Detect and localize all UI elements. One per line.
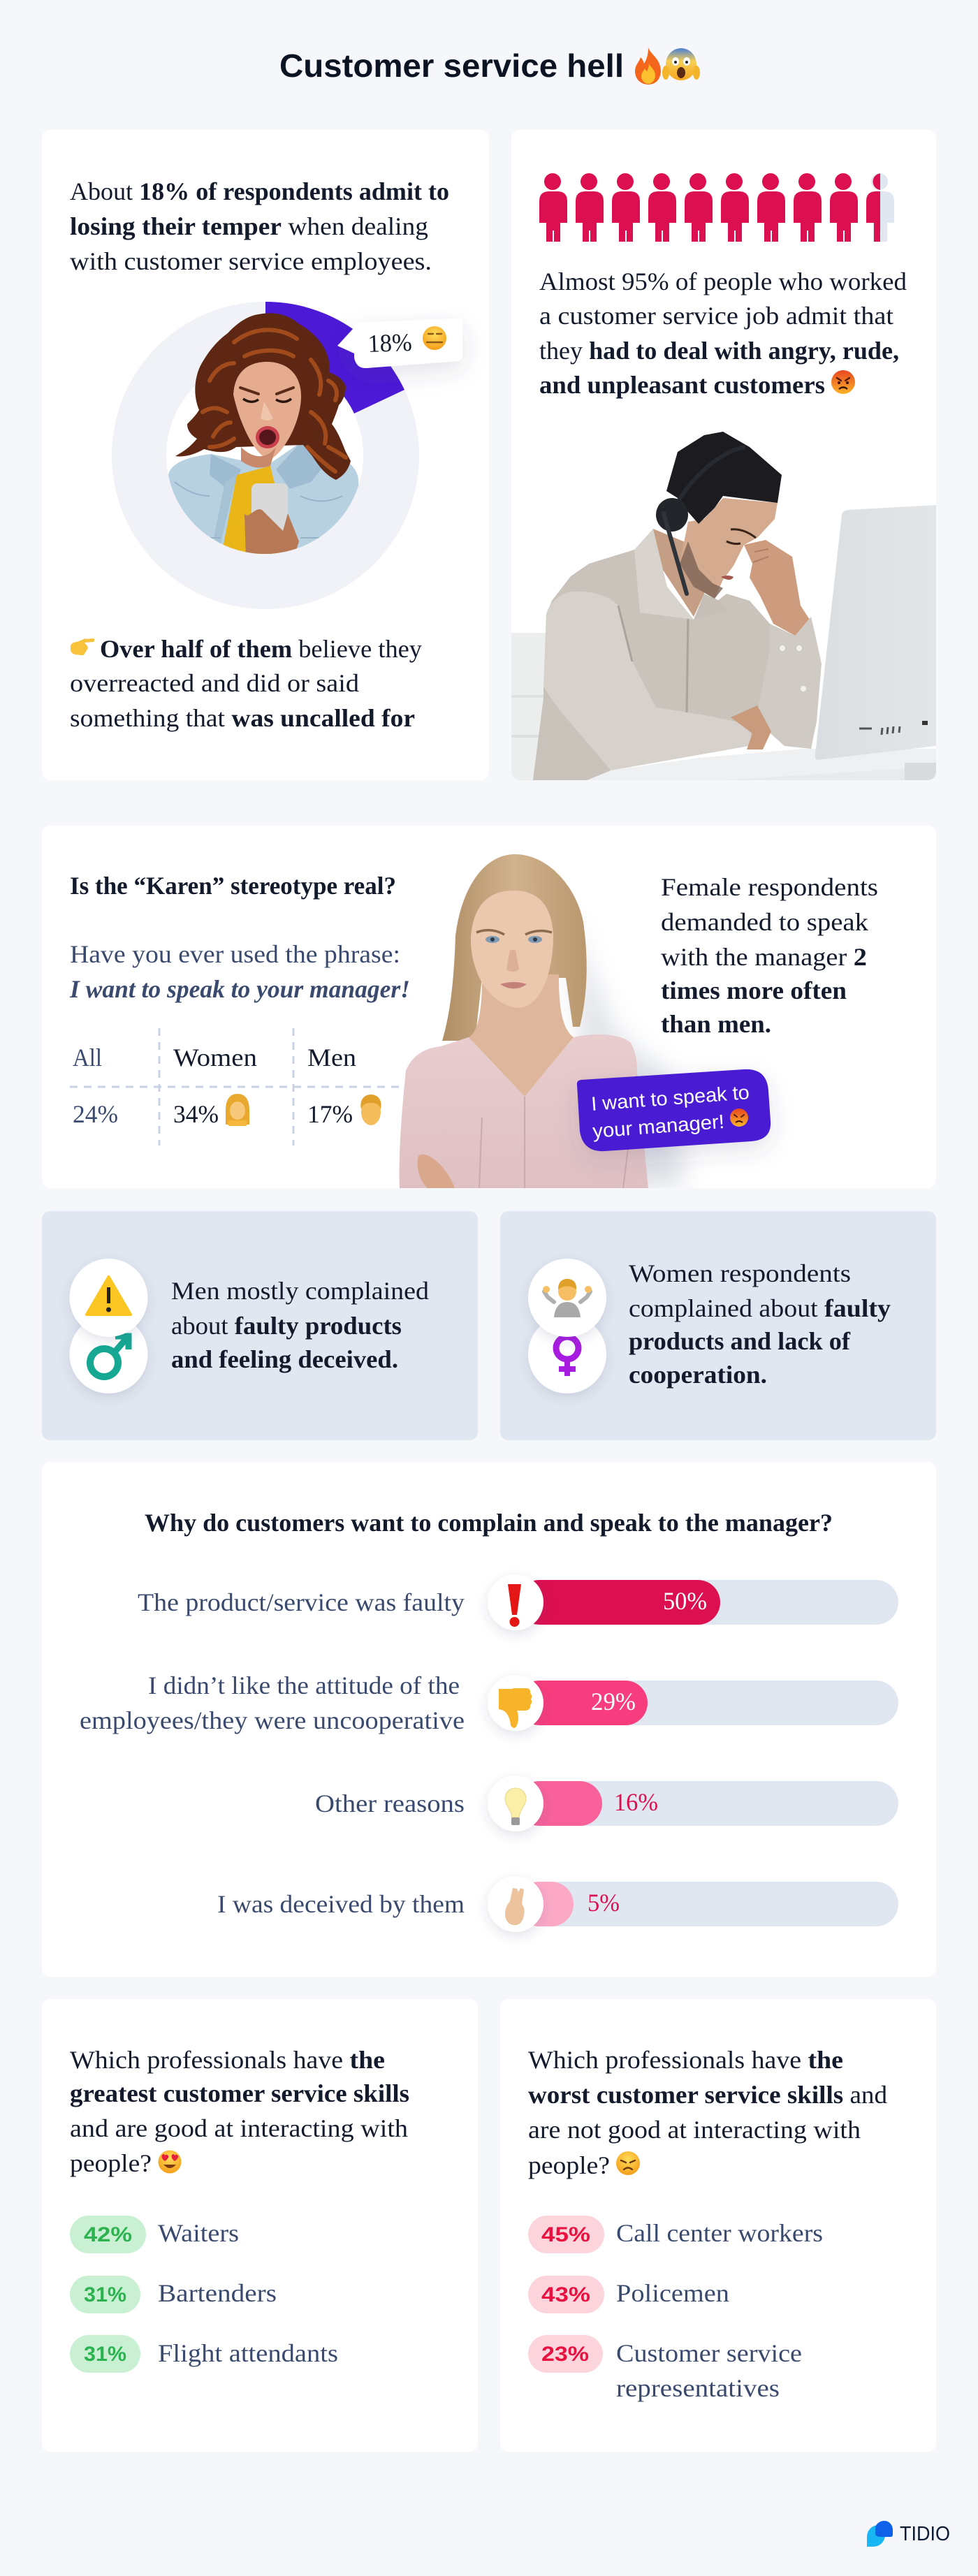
text: worst skills question: are not good at interacting with	[528, 2116, 861, 2144]
text: worst skills question: people?	[528, 2151, 610, 2179]
table: phrase usage: Women	[173, 1044, 257, 1071]
table: phrase usage	[70, 1028, 404, 1146]
text: men complaints	[171, 1277, 429, 1373]
text: female respondents: times more often	[661, 976, 847, 1004]
title: Customer service hell	[279, 47, 624, 84]
heading: Karen stereotype: Is the “Karen” stereotype real?	[70, 872, 396, 900]
icon: thumbs down	[488, 1675, 543, 1731]
conclusion text: Over half of them believe they	[100, 635, 422, 663]
bar: deceived 5%: 5%	[587, 1889, 620, 1917]
table: phrase usage: All	[73, 1044, 102, 1071]
bar: other reasons 16%: Other reasons	[315, 1790, 465, 1817]
speech bubble: I want to speak to	[590, 1081, 750, 1115]
icon: female symbol badge	[528, 1315, 606, 1393]
icon: warning badge	[70, 1259, 148, 1337]
list row: bartenders 31%	[70, 2276, 277, 2313]
conclusion text	[70, 635, 422, 732]
text: 95% dealt with angry customers: they had to deal with angry, rude,	[539, 337, 899, 365]
text: men complaints: about faulty products	[171, 1312, 402, 1340]
list row: flight attendants 31%: 31%	[84, 2343, 126, 2366]
panel: worst skills	[500, 1999, 936, 2452]
text: female respondents: Female respondents	[661, 873, 878, 901]
bar: other reasons 16%	[315, 1776, 898, 1831]
list row: customer service 23%: 23%	[541, 2343, 589, 2366]
text: greatest skills question	[70, 2046, 409, 2177]
text: 95% dealt with angry customers	[539, 268, 907, 399]
icon: heart eyes emoji	[158, 2150, 182, 2174]
photo: shouting woman with phone	[166, 313, 363, 559]
panel: why customers complain	[42, 1462, 936, 1977]
photo: stressed call-center man	[511, 432, 936, 780]
text: greatest skills question: and are good at interacting with	[70, 2114, 408, 2142]
text: worst skills question: worst customer service skills and	[528, 2081, 887, 2109]
collar	[634, 529, 694, 620]
bar: deceived 5%: I was deceived by them	[217, 1890, 465, 1918]
icon: expressionless emoji	[423, 326, 446, 350]
intro text: About 18% of respondents admit to	[70, 177, 449, 205]
list row: flight attendants 31%: Flight attendants	[158, 2339, 338, 2367]
callout: 18%: 18%	[367, 328, 412, 358]
intro text	[70, 177, 449, 275]
icon: male symbol badge	[70, 1315, 148, 1393]
panel: women complaints	[500, 1211, 936, 1440]
text: worst skills question	[528, 2046, 887, 2179]
intro text: losing their temper when dealing	[70, 212, 428, 240]
list row: customer service 23%: Customer service	[616, 2339, 802, 2367]
donut chart 18%	[112, 302, 419, 609]
speech bubble: your manager!	[592, 1111, 725, 1142]
text: greatest skills question: greatest customer service skills	[70, 2079, 409, 2107]
icon: woman emoji	[226, 1094, 249, 1126]
forearm	[731, 705, 771, 749]
bar: other reasons 16%: 16%	[614, 1788, 658, 1816]
headset	[678, 447, 745, 503]
icon: light bulb	[488, 1776, 543, 1831]
icon: angry face emoji	[730, 1108, 748, 1127]
bar: attitude 29%: I didn’t like the attitude of the	[148, 1671, 460, 1699]
text: women complaints: complained about faulty	[629, 1294, 891, 1322]
text: women complaints: products and lack of	[629, 1327, 851, 1355]
icon: man emoji	[360, 1095, 381, 1125]
icon: fire emoji	[635, 47, 661, 85]
list row: bartenders 31%: Bartenders	[158, 2279, 277, 2307]
pictogram: 95% of people	[539, 173, 894, 242]
list row: call center 45%	[528, 2216, 823, 2253]
hand	[744, 540, 811, 636]
table: phrase usage: 17%	[307, 1100, 353, 1128]
face	[680, 498, 778, 599]
table: phrase usage: 34%	[173, 1100, 219, 1128]
text: female respondents: demanded to speak	[661, 908, 868, 936]
list row: customer service 23%	[528, 2335, 802, 2402]
monitor	[815, 505, 936, 760]
table: phrase usage: Men	[307, 1044, 356, 1071]
text: 95% dealt with angry customers: a customer service job admit that	[539, 302, 893, 330]
bar: deceived 5%	[217, 1876, 898, 1932]
icon: screaming face emoji	[662, 48, 700, 80]
torso	[533, 550, 771, 780]
table: phrase usage: 24%	[73, 1100, 118, 1128]
icon: exclamation mark	[488, 1574, 543, 1630]
bar: product faulty 50%: The product/service was faulty	[138, 1588, 465, 1616]
speech bubble	[577, 1069, 771, 1151]
list row: call center 45%: 45%	[541, 2223, 590, 2246]
bar: product faulty 50%	[138, 1574, 898, 1630]
text: 95% dealt with angry customers: Almost 95% of people who worked	[539, 268, 907, 295]
intro text: with customer service employees.	[70, 247, 432, 275]
panel: 95% dealt with angry customers	[511, 130, 936, 780]
text: female respondents	[661, 873, 878, 1038]
panel: 18% lost temper	[42, 130, 489, 780]
text: greatest skills question: Which professionals have the	[70, 2046, 385, 2074]
bar: attitude 29%: 29%	[591, 1688, 636, 1715]
question text: I want to speak to your manager!	[69, 975, 410, 1003]
conclusion text: something that was uncalled for	[70, 704, 415, 732]
panel: Karen stereotype	[42, 826, 936, 1188]
callout: 18%	[337, 319, 462, 368]
list row: waiters 42%	[70, 2216, 239, 2253]
text: men complaints: and feeling deceived.	[171, 1345, 398, 1373]
hair	[666, 432, 782, 524]
text: greatest skills question: people?	[70, 2149, 152, 2177]
icon: pointing hand emoji	[71, 638, 94, 655]
heading: why complain: Why do customers want to complain and speak to the manager?	[145, 1509, 833, 1537]
list row: waiters 42%: Waiters	[158, 2219, 239, 2247]
text: women complaints	[629, 1259, 891, 1389]
text: 95% dealt with angry customers: and unpleasant customers	[539, 371, 825, 399]
text: worst skills question: Which professionals have the	[528, 2046, 843, 2074]
photo: frowning blonde woman	[400, 854, 685, 1188]
list row: customer service 23%: representatives	[616, 2374, 780, 2402]
bar: attitude 29%: employees/they were uncooperative	[80, 1706, 465, 1734]
text: women complaints: cooperation.	[629, 1361, 767, 1389]
panel: greatest skills	[42, 1999, 478, 2452]
question text	[69, 940, 410, 1003]
list row: flight attendants 31%	[70, 2335, 338, 2373]
sleeve	[759, 617, 822, 749]
text: women complaints: Women respondents	[629, 1259, 851, 1287]
list row: waiters 42%: 42%	[84, 2223, 132, 2246]
text: female respondents: than men.	[661, 1010, 771, 1038]
icon: disappointed emoji	[616, 2151, 640, 2175]
question text: Have you ever used the phrase:	[70, 940, 400, 968]
icon: angry face emoji	[831, 370, 855, 394]
panel: men complaints	[42, 1211, 478, 1440]
logo: Tidio: TIDIO	[900, 2523, 950, 2545]
logo: Tidio	[867, 2521, 950, 2547]
bar: attitude 29%	[80, 1671, 898, 1734]
list row: policemen 43%: Policemen	[616, 2279, 729, 2307]
bar: product faulty 50%: 50%	[663, 1587, 707, 1615]
icon: crossed fingers	[488, 1876, 543, 1932]
list row: policemen 43%	[528, 2276, 729, 2313]
icon: shrugging person badge	[528, 1259, 606, 1337]
text: female respondents: with the manager 2	[661, 943, 867, 971]
neck	[653, 529, 704, 617]
list row: policemen 43%: 43%	[541, 2283, 590, 2306]
list row: call center 45%: Call center workers	[616, 2219, 823, 2247]
conclusion text: overreacted and did or said	[70, 669, 359, 697]
text: men complaints: Men mostly complained	[171, 1277, 429, 1305]
list row: bartenders 31%: 31%	[84, 2283, 126, 2306]
